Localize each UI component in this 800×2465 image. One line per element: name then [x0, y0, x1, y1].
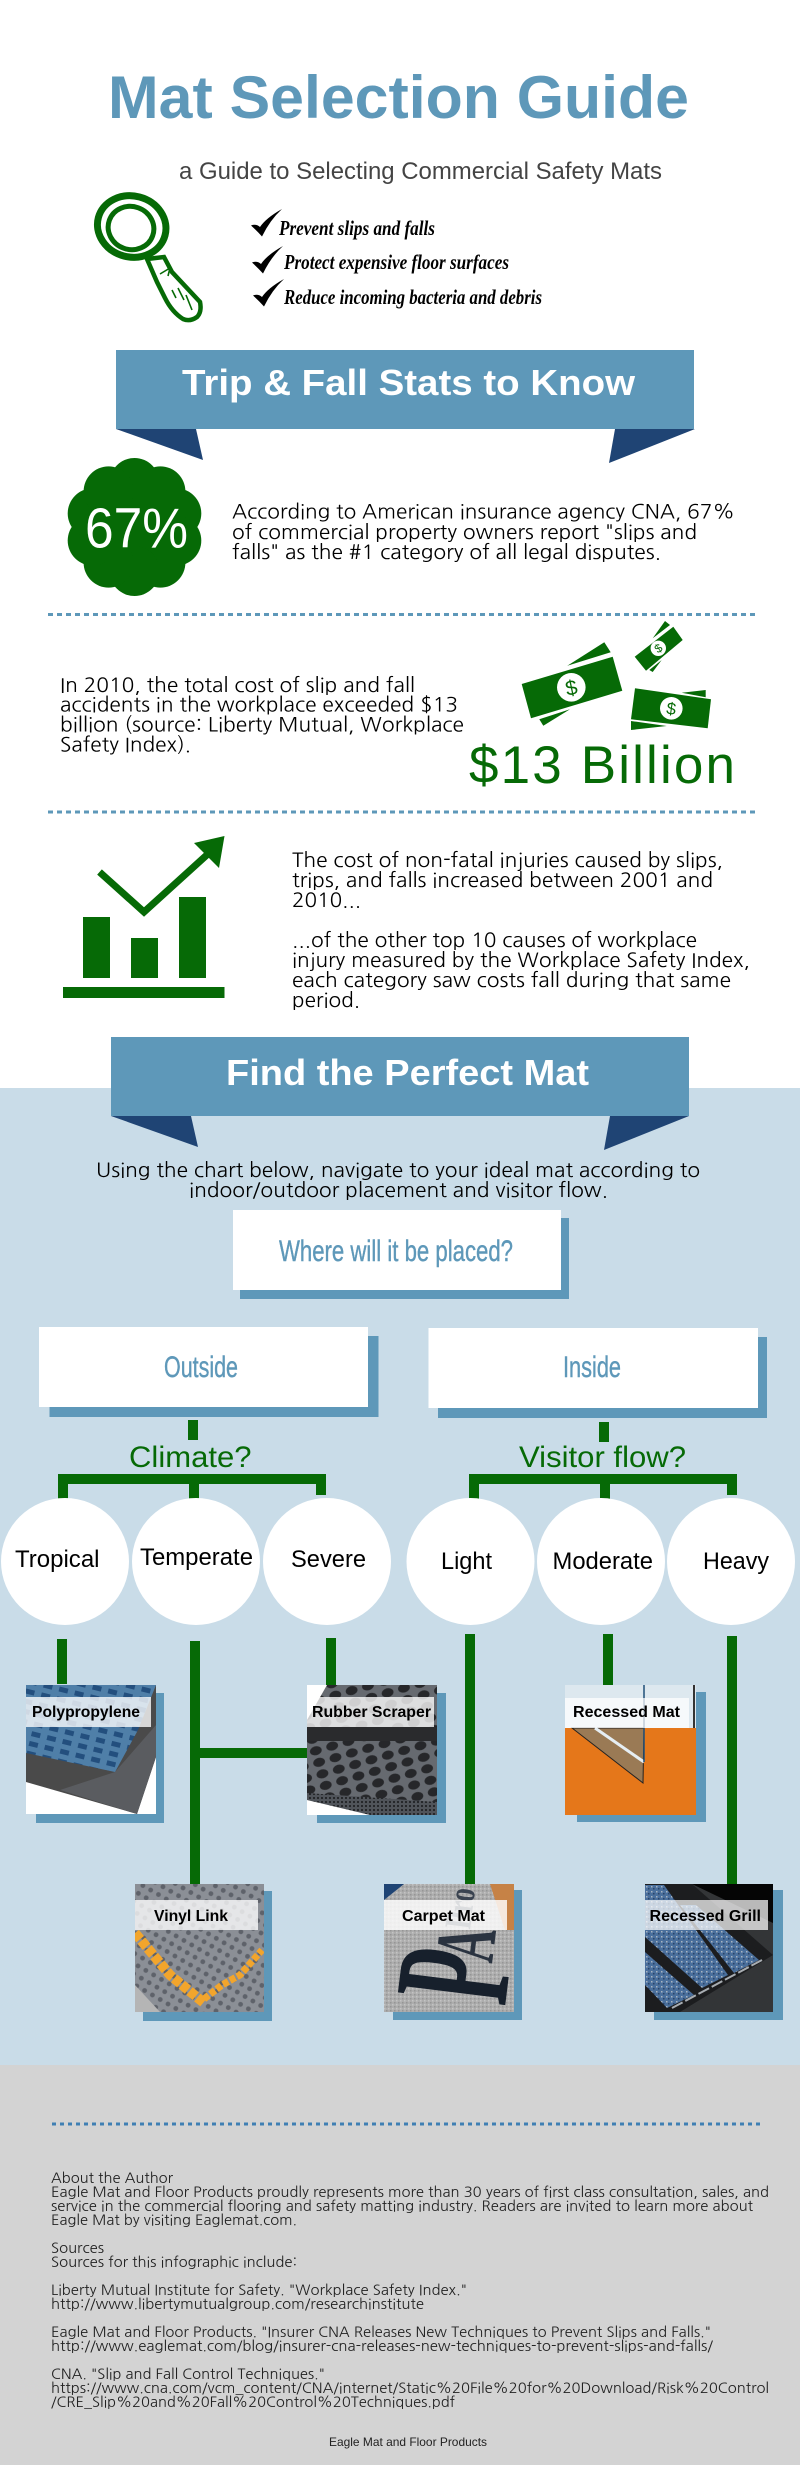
text: sources: Eagle Mat and Floor Products. "Insurer CNA Releases New Techniques to Prevent Slips and Falls.": [51, 2325, 711, 2340]
text: injury costs: The cost of non-fatal injuries caused by slips,: [292, 850, 723, 871]
text: injury costs: each category saw costs fall during that same: [292, 970, 731, 990]
icon: dollar bills: $: [665, 699, 678, 719]
option: light: Light: [441, 1548, 492, 1575]
badge value: 67%: [85, 496, 188, 560]
text: about the author: service in the commercial flooring and safety matting industry. Readers are invited to learn more about: [51, 2199, 754, 2214]
option: moderate: Moderate: [552, 1548, 653, 1575]
text: CNA statistic: of commercial property owners report "slips and: [232, 522, 697, 542]
subtitle: a Guide to Selecting Commercial Safety Mats: [179, 158, 662, 185]
card: polypropylene: Polypropylene: [32, 1704, 140, 1721]
icon: dollar bills: $: [652, 641, 665, 656]
text: CNA statistic: According to American insurance agency CNA, 67%: [232, 502, 735, 522]
text: cost statistic: In 2010, the total cost of slip and fall: [60, 675, 415, 695]
text: sources: http://www.libertymutualgroup.com/researchinstitute: [51, 2297, 424, 2312]
card: carpet mat: P: [361, 1939, 548, 2011]
text: sources: http://www.eaglemat.com/blog/insurer-cna-releases-new-techniques-to-prevent-slips-and-falls/: [51, 2339, 714, 2354]
icon: dollar bills: $: [563, 676, 580, 701]
icon: check mark: [252, 246, 283, 274]
option: light: [406, 1498, 534, 1625]
text: injury costs: ...of the other top 10 causes of workplace: [292, 930, 697, 950]
benefit: protect floors: Protect expensive floor surfaces: [283, 250, 509, 274]
icon: check mark: [253, 279, 284, 306]
text: about the author: About the Author: [51, 2171, 174, 2186]
title: Mat Selection Guide: [108, 64, 689, 131]
option: moderate: [537, 1498, 665, 1625]
icon: magnifying glass: [90, 188, 201, 320]
box: outside: Outside: [164, 1351, 238, 1384]
card: carpet mat: Carpet Mat: [402, 1908, 486, 1925]
box: inside: [428, 1328, 767, 1418]
card: polypropylene: [26, 1685, 164, 1823]
text: sources: https://www.cna.com/vcm_content/CNA/internet/Static%20File%20for%20Download/Risk%20Control: [51, 2381, 769, 2396]
stat: 13 billion: $13 Billion: [469, 736, 735, 795]
icon: check mark: [251, 209, 282, 236]
option: tropical: [1, 1498, 129, 1625]
benefits checklist: [251, 209, 542, 309]
text: sources: /CRE_Slip%20and%20Fall%20Control%20Techniques.pdf: [51, 2395, 455, 2410]
text: injury costs: injury measured by the Workplace Safety Index,: [292, 950, 750, 971]
text: injury costs: 2010...: [292, 890, 361, 910]
icon: rising bar chart: [63, 836, 224, 998]
text: about the author: [51, 2171, 769, 2228]
branch: visitor flow: [469, 1422, 737, 1500]
option: severe: [263, 1498, 391, 1625]
text: cost statistic: [60, 675, 464, 755]
text: sources: Sources for this infographic include:: [51, 2255, 297, 2270]
text: CNA statistic: falls" as the #1 category of all legal disputes.: [232, 542, 661, 562]
text: chart intro: [96, 1160, 700, 1200]
text: CNA statistic: [232, 502, 735, 562]
text: injury costs: trips, and falls increased between 2001 and: [292, 870, 713, 890]
card: recessed mat: Recessed Mat: [573, 1704, 681, 1721]
card: vinyl link: [135, 1884, 272, 2021]
option: temperate: Temperate: [140, 1544, 253, 1571]
banner heading: Trip & Fall Stats to Know: [182, 362, 636, 403]
connectors to mats: [57, 1634, 737, 1884]
branch: visitor flow: Visitor flow?: [519, 1441, 686, 1474]
card: rubber scraper: Rubber Scraper: [312, 1704, 431, 1721]
card: recessed mat: [565, 1685, 706, 1822]
text: chart intro: Using the chart below, navigate to your ideal mat according to: [96, 1160, 700, 1180]
option: temperate: [132, 1498, 260, 1625]
box: outside: [39, 1327, 378, 1417]
text: about the author: Eagle Mat by visiting Eaglemat.com.: [51, 2213, 297, 2228]
card: vinyl link: Vinyl Link: [154, 1908, 228, 1925]
card: rubber scraper: [307, 1685, 446, 1823]
text: sources: CNA. "Slip and Fall Control Techniques.": [51, 2367, 325, 2382]
card: carpet mat: A: [417, 1921, 515, 1966]
option: heavy: Heavy: [703, 1548, 769, 1575]
text: injury costs: period.: [292, 990, 360, 1010]
text: sources: Sources: [51, 2242, 104, 2256]
box: where will it be placed: [233, 1210, 569, 1299]
option: heavy: [667, 1498, 795, 1625]
banner: trip and fall stats: [116, 350, 695, 463]
text: chart intro: indoor/outdoor placement and visitor flow.: [189, 1180, 608, 1200]
benefit: prevent slips: Prevent slips and falls: [278, 216, 435, 240]
text: sources: Liberty Mutual Institute for Safety. "Workplace Safety Index.": [51, 2283, 467, 2298]
option: severe: Severe: [291, 1546, 366, 1573]
footer: Eagle Mat and Floor Products: [329, 2435, 487, 2449]
text: injury costs: [292, 850, 750, 1010]
text: sources: [51, 2242, 769, 2410]
text: cost statistic: accidents in the workplace exceeded $13: [60, 695, 458, 715]
branch: climate: [58, 1420, 326, 1500]
branch: climate: Climate?: [129, 1441, 252, 1474]
box: where will it be placed: Where will it be placed?: [279, 1235, 513, 1268]
text: cost statistic: billion (source: Liberty Mutual, Workplace: [60, 715, 464, 735]
icon: dollar bills: [522, 621, 711, 730]
card: recessed grill: Recessed Grill: [650, 1908, 761, 1925]
card: carpet mat: [384, 1884, 522, 2020]
banner: find the perfect mat: [111, 1037, 689, 1150]
box: inside: Inside: [563, 1351, 621, 1384]
text: about the author: Eagle Mat and Floor Products proudly represents more than 30 years of first class consultation, sales, and: [51, 2185, 769, 2200]
banner heading: Find the Perfect Mat: [226, 1052, 589, 1093]
badge: 67 percent: [68, 458, 201, 596]
card: recessed grill: [645, 1884, 783, 2020]
text: cost statistic: Safety Index).: [60, 735, 191, 755]
card: carpet mat: Pro: [438, 1885, 484, 1931]
option: tropical: Tropical: [15, 1546, 99, 1573]
benefit: reduce bacteria: Reduce incoming bacteria and debris: [283, 285, 542, 309]
